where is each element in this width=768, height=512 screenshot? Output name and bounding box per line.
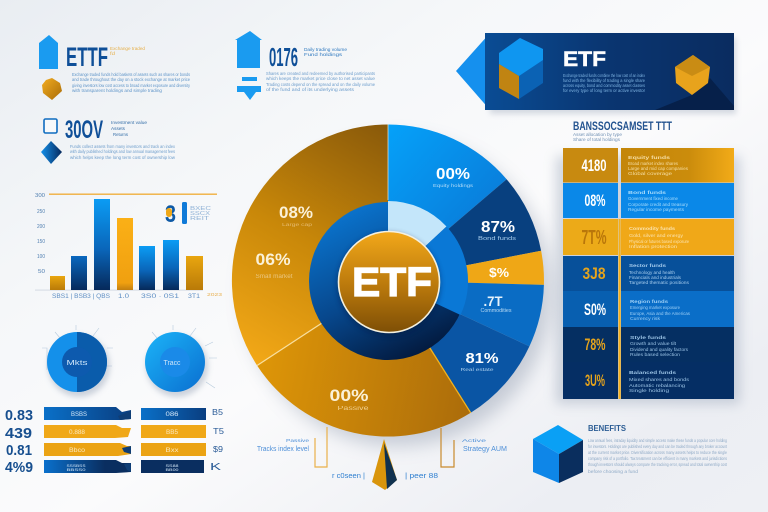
centre badge	[338, 232, 440, 335]
row 1: 4180	[582, 156, 606, 175]
row 7	[563, 362, 734, 399]
row 2: 08%	[584, 191, 606, 210]
description text	[266, 71, 376, 92]
row 6: Style funds	[630, 335, 667, 340]
note text: before choosing a fund	[588, 469, 638, 474]
row 6: 78%	[584, 335, 606, 354]
right orange connector	[441, 428, 454, 467]
gold caption	[110, 46, 146, 56]
row 2: Regular income payments	[628, 207, 685, 212]
icon: gold cube	[675, 55, 710, 95]
row 5: Region funds	[630, 299, 669, 304]
heading: 30OV: 30OV	[65, 116, 103, 144]
row 3: Inflation protection	[629, 244, 678, 249]
side caption: Assets	[111, 126, 126, 131]
slice: top blue	[388, 124, 507, 280]
row 3	[563, 219, 734, 255]
row values right: B5	[212, 408, 224, 417]
icon: gold gem	[42, 78, 62, 100]
y axis labels: 50	[38, 269, 45, 275]
icon: blue hexagon cube	[499, 38, 543, 99]
row 1: Large and mid cap companies	[628, 166, 689, 171]
ring wedge: bright blue	[388, 226, 468, 315]
row 6: Growth and value tilt	[630, 341, 677, 346]
gold caption: Exchange traded	[110, 46, 146, 51]
slice labels: 00%	[330, 386, 368, 405]
row 5: S0%	[584, 300, 606, 319]
slice: navy	[388, 179, 541, 280]
y axis labels: 150	[37, 239, 45, 245]
top-centre info block: 0176	[235, 31, 376, 100]
description text: and trade throughout the day on a stock exchange at market price	[72, 77, 190, 82]
left connector labels	[257, 438, 310, 453]
comparison bars	[5, 407, 225, 476]
baseline	[35, 290, 203, 291]
chart top rule	[49, 194, 217, 195]
icon: outlined square	[44, 119, 57, 133]
gauge left	[42, 325, 113, 397]
y axis labels	[35, 193, 45, 275]
description text	[72, 72, 191, 93]
bottom labels	[332, 471, 438, 480]
x axis labels: 1.0	[118, 294, 130, 300]
right bars: BB00	[166, 467, 180, 472]
row 5: Emerging market exposure	[630, 305, 680, 310]
chart legend	[165, 201, 212, 228]
slice labels: Bond funds	[478, 236, 517, 242]
heading: ETF: ETTF	[66, 42, 108, 72]
centre badge: ETF	[352, 259, 432, 305]
row 3: Commodity funds	[629, 226, 676, 231]
left bars	[44, 407, 131, 473]
banner arrow	[456, 33, 490, 110]
description text: Shares are created and redeemed by authorised participants	[266, 71, 376, 76]
icon: blue diamond	[41, 141, 62, 164]
left connector labels: Passive	[286, 438, 310, 443]
table shadow	[556, 156, 740, 404]
left bars: SSSBSS	[66, 463, 86, 468]
note title: BENEFITS	[588, 424, 627, 433]
bars	[50, 199, 203, 290]
slice labels: Equity holdings	[433, 183, 474, 188]
heading: 0176: 0176	[269, 42, 298, 72]
row 1	[563, 148, 734, 182]
banner title: ETF: ETF	[563, 48, 606, 71]
left bars: 0.888	[69, 429, 85, 436]
row 1: Equity funds	[628, 155, 671, 160]
banner text: fund with the flexibility of trading a single share	[563, 78, 646, 83]
row 4: Financials and industrials	[629, 275, 682, 280]
bottom-right note	[533, 424, 728, 483]
row values left	[5, 407, 33, 476]
gold caption: fd	[110, 51, 116, 56]
row 4: 3J8	[582, 264, 606, 283]
banner text: Exchange traded funds combine the low cost of an index	[563, 73, 646, 78]
row values left: 0.83	[5, 407, 33, 424]
banner shadow	[490, 38, 736, 114]
row 7: Automatic rebalancing	[629, 383, 686, 388]
row values left: 4%9	[5, 459, 33, 476]
table subtitle	[573, 132, 623, 142]
right bars: SS88	[166, 463, 180, 468]
right connector labels	[462, 438, 507, 453]
icon: blue house arrow with chevron	[235, 31, 262, 100]
ring wedge: pale blue	[388, 201, 446, 281]
row 3: Physical or futures based exposure	[629, 239, 689, 244]
note text: at the current market price. Diversification across many assets helps to reduce the single	[588, 450, 727, 455]
description text: of the fund and of its underlying assets	[266, 87, 355, 92]
donut chart	[232, 124, 552, 446]
left gold connector	[315, 427, 327, 467]
description text: which helps keep the long term cost of ownership low	[70, 155, 176, 160]
row 4: Technology and health	[629, 270, 675, 275]
row 3: Gold, silver and energy	[629, 233, 684, 238]
chart legend: SSCX	[190, 211, 211, 217]
table subtitle: Share of total holdings	[573, 137, 621, 142]
row 6: Rules based selection	[630, 352, 681, 357]
gold divider	[618, 219, 621, 399]
slice labels: Commodities	[480, 308, 512, 314]
row 5	[563, 291, 734, 327]
right table heading	[573, 119, 672, 142]
row 4: Sector funds	[629, 263, 667, 268]
slice labels: Real estate	[460, 367, 494, 372]
description text: with daily published holdings and low annual management fees	[70, 149, 176, 154]
right bars: Bxx	[166, 447, 179, 454]
row 5: Currency risk	[630, 316, 661, 321]
slice labels: $%	[489, 265, 509, 280]
left connector labels: Tracks index level	[257, 446, 309, 453]
right bars	[141, 408, 206, 473]
gold cube shadow	[655, 78, 734, 110]
row 7: Single holding	[629, 388, 670, 393]
row 6	[563, 327, 734, 362]
inner ring	[309, 202, 467, 360]
banner panel	[485, 33, 734, 110]
slice labels: Small market	[256, 274, 293, 280]
slice: mid blue	[388, 280, 544, 346]
table title: BANSSOCSAMSET TTT	[573, 119, 672, 133]
row 7: Mixed shares and bonds	[629, 377, 690, 382]
slice labels: .7T	[484, 293, 503, 309]
right bars: 086	[166, 411, 179, 418]
description text: Trading costs depend on the spread and on the daily volume	[266, 82, 375, 87]
row values right: $9	[213, 445, 224, 454]
y axis labels: 100	[37, 254, 45, 260]
row 5: Europe, Asia and the Americas	[630, 311, 691, 316]
slice: dark blue	[388, 280, 529, 413]
row 1: Broad market index shares	[628, 161, 679, 166]
right bars: BB5	[166, 429, 178, 436]
x axis labels: 2023	[207, 292, 223, 297]
row 6: Dividend and quality factors	[630, 347, 689, 352]
slice labels: 87%	[481, 219, 515, 236]
slice labels	[256, 166, 517, 412]
description text: which keeps the market price close to net asset value	[266, 76, 375, 81]
row values left: 439	[5, 425, 32, 442]
icon: blue house arrow	[39, 35, 58, 69]
right connector labels: Strategy AUM	[463, 446, 507, 453]
row 2: Bond funds	[628, 190, 667, 195]
bar chart	[35, 193, 223, 300]
top-right banner	[456, 33, 736, 114]
side caption	[304, 47, 347, 58]
slice labels: 00%	[436, 166, 470, 183]
icon: blue cube	[533, 425, 583, 483]
icon: kite pointer	[372, 439, 397, 490]
table subtitle: Asset allocation by type	[573, 132, 623, 137]
bottom labels: r c0seen |	[332, 471, 365, 480]
banner text: for every type of long term or active investor	[563, 88, 646, 93]
x axis labels: 3T1	[188, 294, 201, 300]
side caption: Fund holdings	[304, 52, 343, 58]
dial gauges	[42, 325, 217, 397]
row 2	[563, 183, 734, 218]
description text: with transparent holdings and simple trading	[72, 88, 162, 93]
banner text	[563, 73, 646, 93]
row 4: Targeted thematic positions	[629, 280, 690, 285]
y axis labels: 200	[37, 224, 45, 230]
chart legend: BXEC	[190, 206, 212, 212]
x axis labels: SBS1 | BSB3 | QBS	[52, 294, 110, 300]
torn bar ends	[118, 411, 131, 472]
row 2: Corporate credit and treasury	[628, 202, 689, 207]
chart legend: 3	[165, 201, 176, 228]
slice labels: Large cap	[282, 222, 313, 227]
gauge left: Mkts	[66, 360, 88, 367]
slice: small gold	[388, 251, 544, 285]
slice labels: 81%	[466, 350, 498, 367]
left bars: BBSS0	[66, 467, 87, 472]
gauge right: Tracc	[164, 360, 181, 367]
row values left: 0.81	[6, 442, 32, 459]
description text: Exchange traded funds hold baskets of assets such as shares or bonds	[72, 72, 191, 77]
row 1: Global coverage	[628, 171, 673, 176]
row values right: T5	[213, 427, 225, 436]
chart shadow	[244, 138, 552, 446]
description text: giving investors low cost access to broad market exposure and diversity	[72, 83, 191, 88]
x axis labels	[52, 292, 223, 300]
side caption: Daily trading volume	[304, 47, 347, 53]
y axis labels: 250	[37, 209, 45, 215]
slice labels: 06%	[256, 250, 290, 269]
description text	[70, 144, 176, 160]
y axis labels: 300	[35, 193, 45, 199]
row 4	[563, 256, 734, 291]
row 7: Balanced funds	[629, 370, 677, 375]
slice labels: 08%	[279, 203, 313, 222]
bottom labels: | peer 88	[405, 471, 438, 480]
left bars: Bbco	[69, 447, 85, 454]
side caption: Investment value	[111, 120, 147, 125]
description text: Funds collect assets from many investors and track an index	[70, 144, 176, 149]
row values right: K	[210, 462, 222, 473]
row 7: 3U%	[585, 371, 605, 390]
right connector labels: Active	[462, 438, 487, 443]
x axis labels: 3S0 · 0S1	[141, 294, 180, 300]
slice labels: Passive	[338, 406, 369, 412]
side caption: Returns	[113, 132, 129, 137]
banner text: across equity, bond and commodity asset classes	[563, 83, 645, 88]
slice dividers	[257, 124, 471, 413]
note text	[588, 438, 728, 474]
slice: bottom gold 00%	[257, 280, 471, 437]
row 3: 7T%	[582, 227, 607, 249]
row values right	[210, 408, 225, 473]
bottom connectors	[257, 427, 507, 490]
row 2: Government fixed income	[628, 196, 678, 201]
mid-left info block: 30OV	[41, 116, 176, 164]
side caption	[111, 120, 147, 137]
note text: company risk of a portfolio. Tax treatment can be efficient in many markets and jurisdictions	[588, 456, 728, 461]
slice: left gold 08%	[232, 124, 388, 366]
right data table	[556, 148, 740, 404]
gauge right	[145, 325, 217, 397]
left bars: BSBS	[71, 411, 88, 418]
top-left info block: ETF	[39, 35, 191, 100]
chart legend: REIT	[190, 216, 209, 222]
